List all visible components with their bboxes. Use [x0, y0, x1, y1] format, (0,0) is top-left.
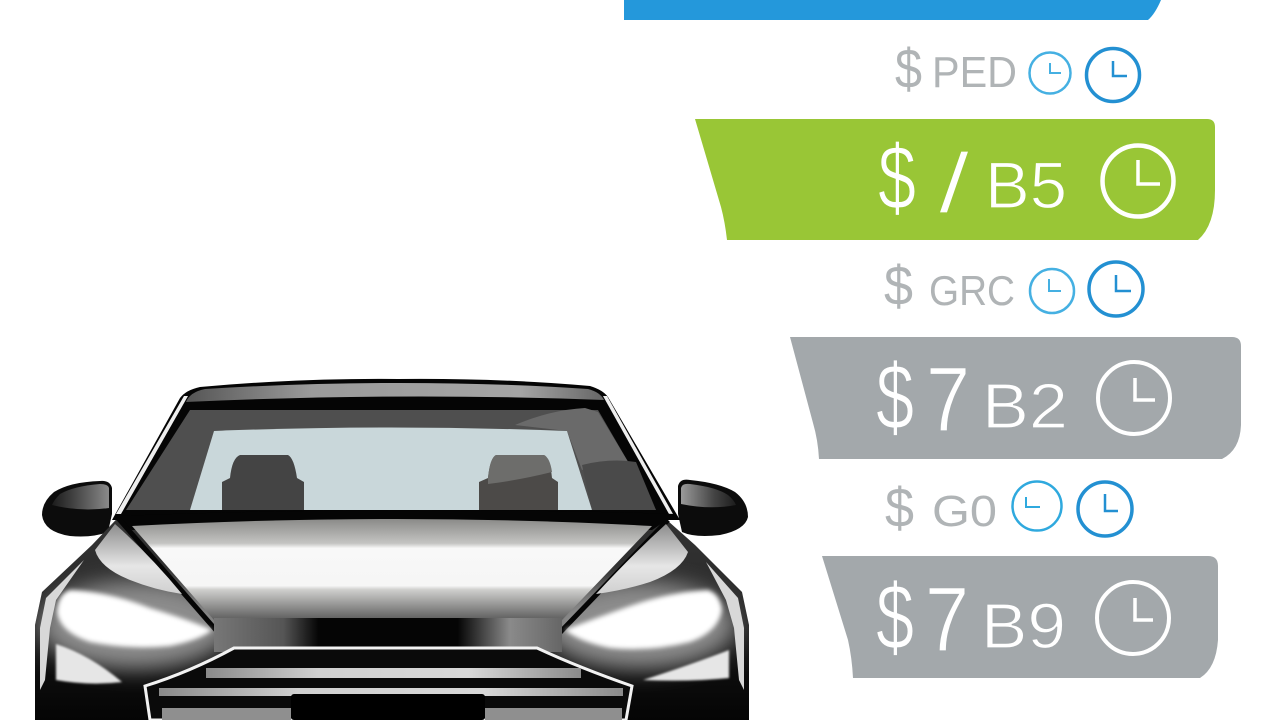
- price label: G0: [932, 487, 997, 536]
- windshield light glass: [190, 428, 592, 510]
- price label: [885, 476, 997, 539]
- small price row: $ GRC: [884, 254, 1143, 317]
- price label: [876, 564, 1066, 671]
- left headlight: [57, 590, 212, 647]
- hood: [132, 519, 652, 620]
- windshield tinted glass: [126, 410, 656, 510]
- left fender highlight: [95, 524, 182, 594]
- right fog light: [643, 650, 729, 681]
- windshield reflection: [515, 408, 630, 470]
- price label: [895, 37, 1017, 100]
- roof and windshield frame: [112, 379, 680, 520]
- body glow around headlights: [40, 581, 735, 669]
- windshield frame highlight right: [603, 396, 673, 514]
- car illustration: [35, 379, 749, 720]
- price label: 7: [926, 349, 970, 451]
- price label: [878, 127, 1067, 230]
- grille bar lower right: [485, 708, 622, 720]
- icon: large clock: [1086, 48, 1140, 102]
- price label: B5: [985, 148, 1067, 222]
- icon: large clock: [1078, 482, 1132, 536]
- price label: B9: [981, 590, 1066, 662]
- right headlight: [565, 590, 722, 649]
- grille bar upper: [206, 668, 581, 678]
- price label: [876, 344, 1068, 451]
- windshield frame highlight left: [116, 396, 188, 514]
- left mirror: [42, 481, 112, 536]
- icon: small clock: [1030, 269, 1074, 313]
- price label: /: [939, 136, 970, 230]
- green price bar: [695, 119, 1215, 240]
- left fog light: [56, 644, 122, 684]
- hood right seam: [548, 520, 668, 645]
- right mirror: [678, 480, 748, 536]
- blue price bar: [624, 0, 1161, 20]
- small price row: $ GO: [885, 476, 1132, 539]
- right seat: [479, 455, 558, 510]
- left seat: [222, 455, 304, 510]
- icon: clock: [1102, 146, 1174, 216]
- grille: [145, 648, 632, 720]
- roof panel: [186, 383, 604, 402]
- price label: $: [878, 127, 916, 229]
- price label: 7: [925, 569, 969, 671]
- price label: $: [895, 37, 922, 100]
- icon: large clock: [1089, 262, 1143, 316]
- cowl: [116, 510, 676, 530]
- right seat highlight: [488, 455, 552, 484]
- price label: $: [876, 564, 914, 669]
- hood left seam: [118, 518, 229, 645]
- nose panel: [214, 618, 562, 652]
- side highlight left: [40, 560, 84, 690]
- price label: [884, 254, 1015, 317]
- license plate: [291, 694, 485, 720]
- car body: [35, 505, 749, 720]
- price label: $: [876, 344, 914, 449]
- right fender highlight: [596, 524, 688, 594]
- price label: $: [885, 476, 914, 539]
- side highlight right: [706, 562, 744, 690]
- price label: B2: [982, 370, 1068, 442]
- price label: GRC: [929, 267, 1015, 314]
- small price row: $PED: [895, 37, 1140, 102]
- icon: small clock: [1012, 482, 1062, 530]
- gray price bar two: [822, 556, 1218, 678]
- gray price bar one: [790, 337, 1241, 459]
- reflection right side: [582, 461, 656, 510]
- price label: PED: [932, 48, 1017, 97]
- icon: clock: [1097, 582, 1169, 654]
- grille bar lower left: [162, 708, 291, 720]
- price label: $: [884, 254, 913, 317]
- icon: small clock: [1030, 52, 1070, 94]
- icon: clock: [1098, 362, 1170, 434]
- grille bar middle: [159, 688, 623, 696]
